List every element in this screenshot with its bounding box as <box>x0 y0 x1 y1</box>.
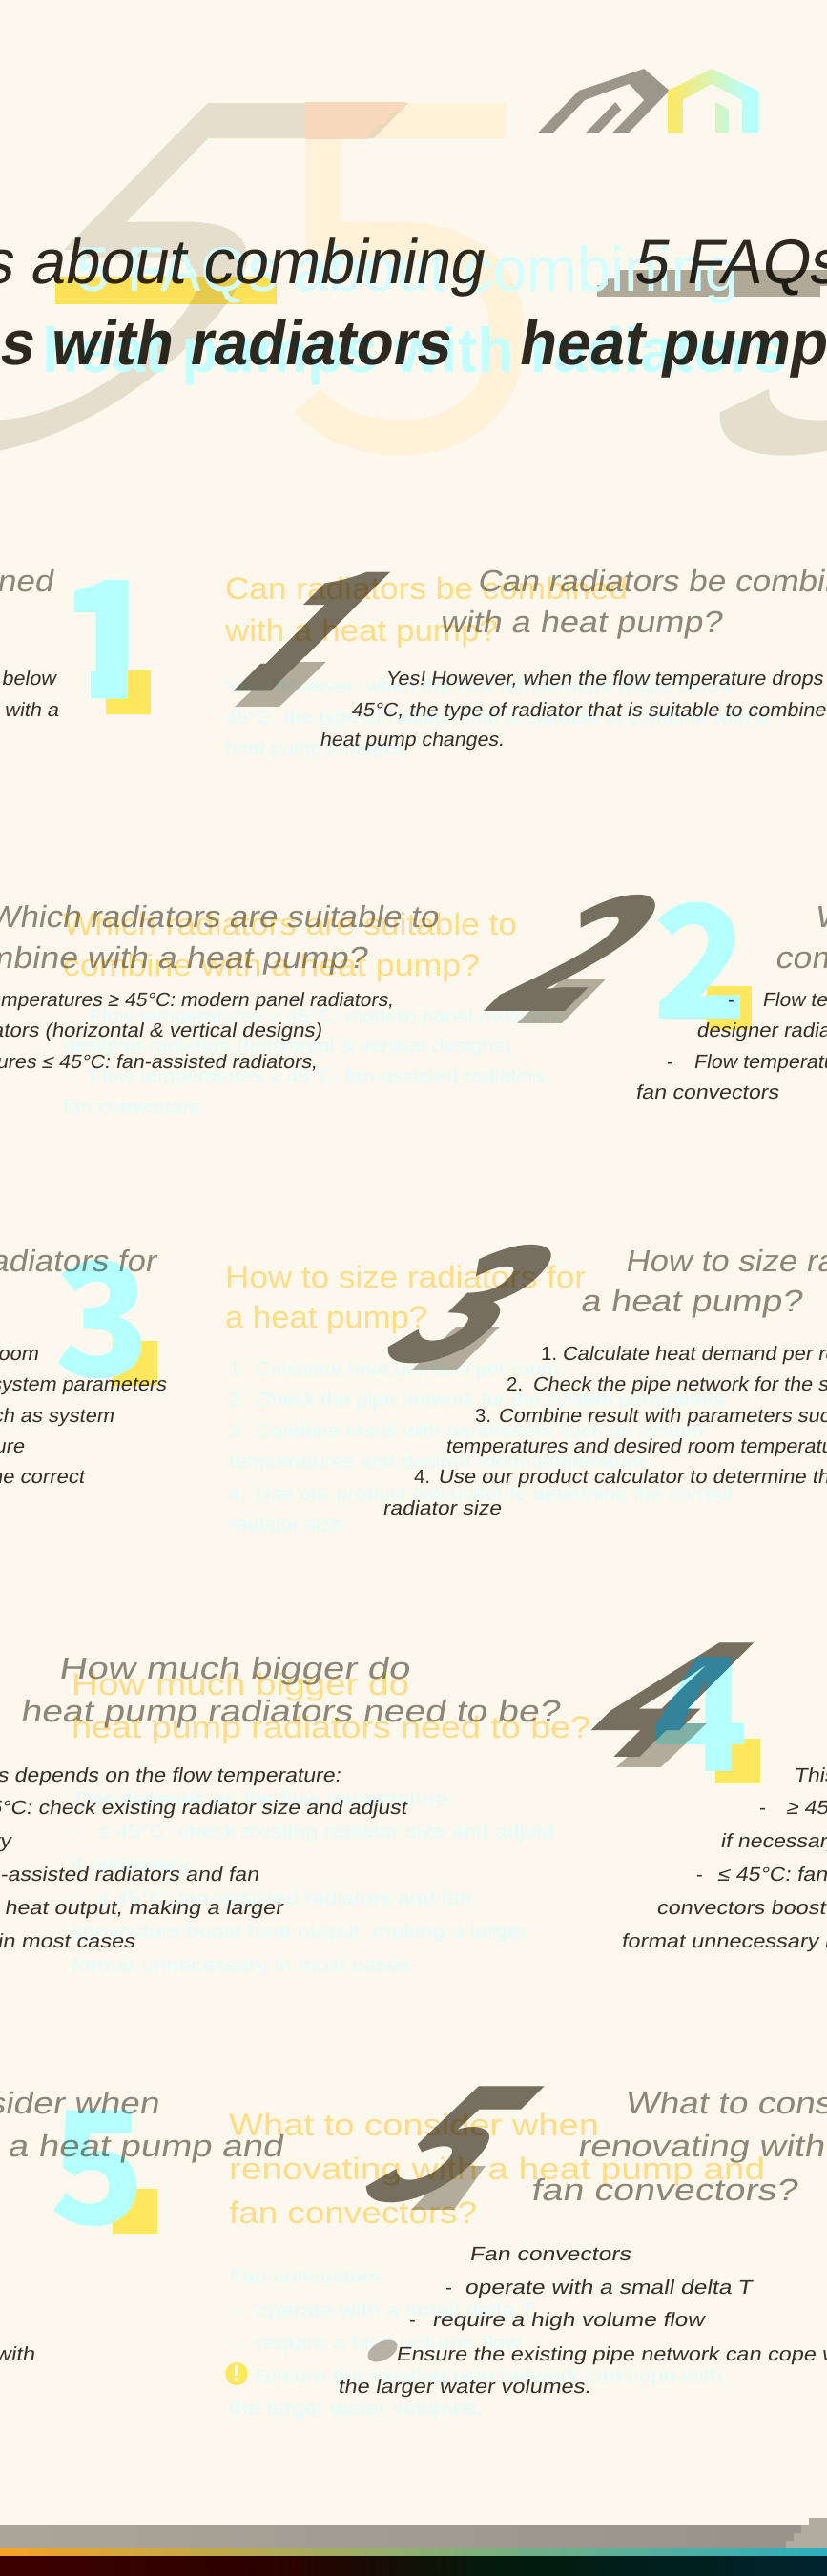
numeral 1 dark with shadow <box>233 572 390 707</box>
heading 5 dark <box>0 2086 827 2207</box>
body 3 dark: 2. <box>507 1373 523 1395</box>
title line 1 dark <box>0 227 827 298</box>
body 3 pale: Use our product calculator to determine the correct <box>256 1483 734 1505</box>
heading 3 dark <box>0 1244 827 1318</box>
body 4 pale: - <box>72 1821 78 1843</box>
body 5 dark: - <box>409 2309 416 2331</box>
title highlight bars <box>55 270 827 304</box>
heading 4 dark: How much bigger do <box>57 1651 414 1685</box>
body 4 pale: convectors boost heat output, making a larger <box>72 1921 527 1943</box>
body 4 pale: - <box>72 1887 78 1909</box>
numeral 1 dark with shadow: 1 <box>160 507 484 734</box>
body 4 pale: ≤ 45°C: fan-assisted radiators and fan <box>97 1887 472 1909</box>
body 2 pale: fan convectors <box>63 1096 200 1118</box>
body 2 pale: Flow temperatures ≥ 45°C: modern panel radiators, <box>90 1005 567 1027</box>
body 4 dark: - <box>696 1864 703 1886</box>
body 3 dark: 4. <box>414 1466 430 1488</box>
body 5 dark: the larger water volumes. <box>337 2376 593 2398</box>
highlight bar: grey <box>597 270 827 297</box>
body 1 pale: Yes! However, when the flow temperature drops below <box>225 675 734 697</box>
body 2 pale: Flow temperatures ≤ 45°C: fan-assisted radiators, <box>90 1065 551 1087</box>
body 5 dark: Fan convectors <box>468 2243 633 2265</box>
heading 5 pale: fan convectors? <box>229 2195 477 2230</box>
heading 1 dark <box>0 564 827 639</box>
heading 2 pale <box>63 907 517 982</box>
numeral shadow 4 <box>715 1739 760 1783</box>
icon: warning sheared grey <box>362 2340 403 2361</box>
body 5 pale: - <box>229 2332 236 2354</box>
heading 3 pale: How to size radiators for <box>225 1260 586 1294</box>
body 1 dark: heat pump changes. <box>319 729 507 751</box>
heading 1 pale: Can radiators be combined <box>225 571 628 606</box>
logo: gradient house <box>668 69 758 133</box>
logo: sheared grey house <box>538 69 691 133</box>
body 2 dark: - <box>667 1051 673 1073</box>
body 3 pale: Calculate heat demand per room <box>256 1358 559 1380</box>
heading 3 dark: a heat pump? <box>579 1284 806 1318</box>
body 3 pale: Check the pipe network for the system parameters <box>256 1389 725 1411</box>
body 1 dark <box>0 668 827 751</box>
heading 4 pale <box>72 1667 590 1744</box>
heading 1 dark: with a heat pump? <box>438 605 726 639</box>
body 4 dark: if necessary <box>719 1830 827 1852</box>
panel: FAQ 3 <box>0 1180 827 1535</box>
footer gradient strip <box>0 2548 827 2556</box>
body 5 pale: - <box>229 2299 236 2321</box>
body 4 pale: if necessary <box>72 1854 191 1876</box>
numeral 3 cyan: 3 <box>54 1194 151 1422</box>
body 5 pale: require a high volume flow <box>256 2332 522 2354</box>
body 3 dark <box>0 1343 827 1519</box>
heading 2 dark <box>0 899 827 975</box>
body 3 pale: 3. <box>229 1420 245 1442</box>
body 4 pale: This depends on the flow temperature: <box>72 1788 454 1810</box>
body 5 dark: operate with a small delta T <box>464 2277 755 2298</box>
icon: warning exclamation <box>225 2362 248 2385</box>
title line 1: 5 FAQs about combining <box>76 234 738 304</box>
numeral 2 dark with shadow: 2 <box>431 830 755 1057</box>
body 4 dark <box>0 1764 827 1952</box>
body 5 pale: operate with a small delta T <box>256 2299 536 2321</box>
numeral 5 dark with shadow: 5 <box>302 2019 626 2246</box>
body 3 dark: 3. <box>475 1405 491 1427</box>
body 3 pale: 2. <box>229 1389 245 1411</box>
body 5 pale <box>229 2266 722 2420</box>
footer bands <box>0 2518 827 2576</box>
body 1 pale: 45°C, the type of radiator that is suitable to combine with a <box>225 707 769 729</box>
body 1 pale <box>225 675 769 759</box>
title line 2: heat pumps with radiators <box>42 315 786 385</box>
body 4 pale <box>72 1788 554 1976</box>
overlap patch of the two numeral 5 top bars <box>305 102 405 139</box>
heading 4 pale: How much bigger do <box>72 1667 409 1701</box>
panel: FAQ 4 <box>0 1642 827 1975</box>
heading 5 pale: What to consider when <box>229 2108 599 2142</box>
body 4 pale: ≥ 45°C: check existing radiator size and adjust <box>97 1821 554 1843</box>
heading 1 pale <box>224 571 628 648</box>
title, pale layer <box>42 234 786 385</box>
footer grey band <box>0 2525 827 2548</box>
heading 2 pale: combine with a heat pump? <box>63 948 480 982</box>
body 5 dark: - <box>445 2277 452 2298</box>
large background numeral 5, pale layer <box>307 120 507 438</box>
heading 4 dark <box>19 1651 564 1728</box>
numeral 2 cyan: 2 <box>652 836 748 1064</box>
heading 5 pale: renovating with a heat pump and <box>229 2152 765 2186</box>
heading 1 pale: with a heat pump? <box>224 613 498 648</box>
body 2 dark <box>0 989 827 1103</box>
heading 4 pale: heat pump radiators need to be? <box>72 1710 590 1744</box>
heading 3 pale <box>225 1260 586 1334</box>
body 5 pale: Fan convectors <box>229 2266 381 2288</box>
body 5 dark: Ensure the existing pipe network can cope with <box>395 2343 827 2365</box>
body 5 pale: the larger water volumes. <box>229 2398 483 2420</box>
body 3 pale <box>229 1358 734 1535</box>
logo <box>538 69 758 133</box>
numeral shadow 1 <box>106 670 151 714</box>
body 5 pale: Ensure the existing pipe network can cope with <box>256 2365 722 2387</box>
panel: FAQ 1 <box>0 568 827 758</box>
heading 5 dark: fan convectors? <box>529 2173 801 2207</box>
numeral 5 cyan: 5 <box>50 2042 145 2270</box>
heading 4 dark: heat pump radiators need to be? <box>19 1694 564 1728</box>
body 3 pale: 1. <box>229 1358 245 1380</box>
numeral shadow 5 <box>113 2189 157 2234</box>
body 3 pale: 4. <box>229 1483 245 1505</box>
footer dark band <box>0 2556 827 2576</box>
title line 2 dark <box>0 308 827 379</box>
body 5 dark <box>0 2243 827 2398</box>
panel: FAQ 5 <box>0 2019 827 2420</box>
body 2 dark: - <box>728 989 734 1011</box>
body 4 dark: - <box>759 1797 766 1819</box>
large background numeral 5, sheared grey layer <box>0 120 827 438</box>
body 3 dark: 1. <box>541 1343 557 1365</box>
body 2 pale: designer radiators (horizontal & vertical designs) <box>63 1035 511 1057</box>
body 2 pale: - <box>63 1005 70 1027</box>
panel: FAQ 2 <box>0 830 827 1118</box>
title, dark sheared layer <box>0 227 827 379</box>
numeral 4 cyan: 4 <box>652 1589 748 1817</box>
body 5 dark: require a high volume flow <box>431 2309 707 2331</box>
body 2 dark: fan convectors <box>634 1082 781 1103</box>
highlight bar: yellow <box>55 277 277 304</box>
heading 3 pale: a heat pump? <box>225 1300 427 1334</box>
body 2 pale: - <box>63 1065 70 1087</box>
body 3 dark: temperatures and desired room temperature <box>445 1435 827 1457</box>
heading 2 pale: Which radiators are suitable to <box>63 907 517 941</box>
numeral shadow 3 <box>113 1341 157 1386</box>
heading 5 pale <box>229 2108 765 2230</box>
numeral shadow 2 <box>707 986 752 1030</box>
footer stepped corner <box>786 2518 827 2548</box>
numeral 3 dark with shadow: 3 <box>324 1180 648 1407</box>
body 2 pale <box>63 1005 567 1118</box>
body 3 pale: Combine result with parameters such as system <box>256 1420 704 1442</box>
body 3 pale: radiator size <box>229 1514 342 1535</box>
numeral 1 cyan: 1 <box>61 514 156 742</box>
body 3 dark: radiator size <box>382 1497 504 1519</box>
body 1 pale: heat pump changes. <box>225 737 411 759</box>
body 4 pale: format unnecessary in most cases <box>72 1954 411 1976</box>
body 3 pale: temperatures and desired room temperature <box>229 1451 646 1473</box>
